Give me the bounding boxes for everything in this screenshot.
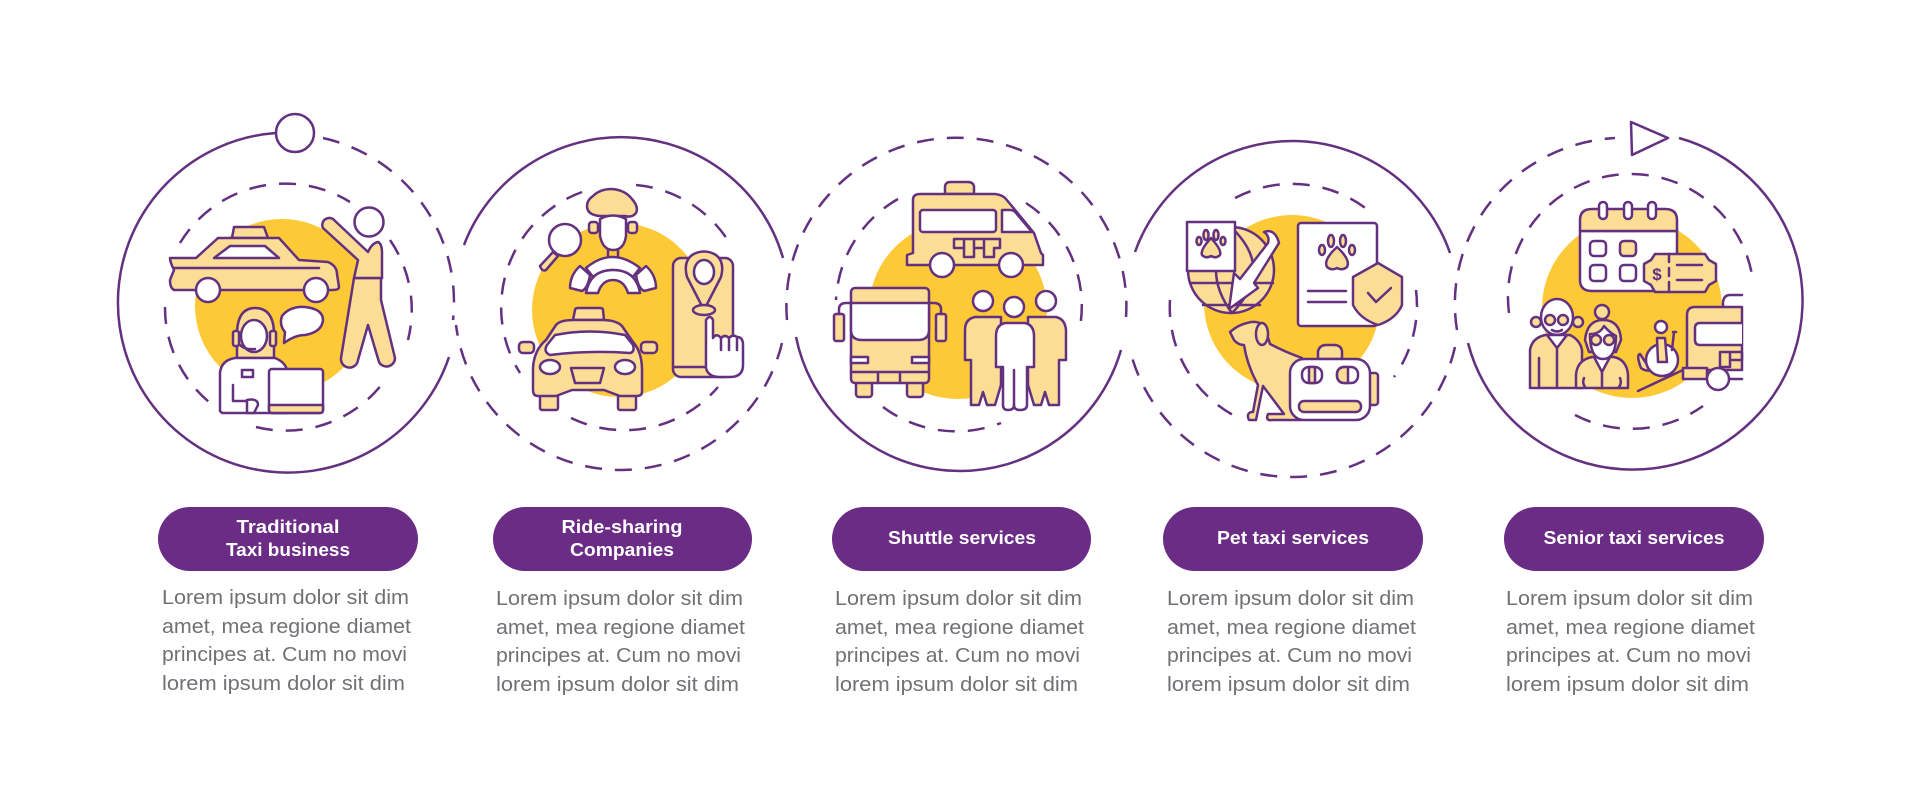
- icon: ticket: [1644, 254, 1716, 292]
- pill: Shuttle services: Shuttle services: [888, 528, 1036, 548]
- pill: Shuttle services: [832, 507, 1091, 571]
- inner dashed ring: [1508, 174, 1753, 429]
- inner dashed ring: [1170, 184, 1417, 415]
- icon: taxi car: [170, 227, 339, 302]
- text: column 3 body: Lorem ipsum dolor sit dim: [835, 587, 1082, 610]
- text: column 3 body: lorem ipsum dolor sit dim: [835, 673, 1078, 696]
- yellow blob 5: [1542, 218, 1722, 398]
- pill: Ride-sharing Companies: Companies: [570, 540, 674, 560]
- text: column 5 body: Lorem ipsum dolor sit dim: [1506, 587, 1753, 610]
- yellow blob 4: [1204, 215, 1380, 391]
- pill: Pet taxi services: Pet taxi services: [1217, 528, 1369, 548]
- icon: elderly man: [1530, 299, 1583, 388]
- text: column 5 body: principes at. Cum no movi: [1506, 644, 1751, 667]
- text: column 1 body: amet, mea regione diamet: [162, 615, 411, 638]
- text: column 1 body: lorem ipsum dolor sit dim: [162, 672, 405, 695]
- icon: dog: [1230, 322, 1302, 420]
- panel: senior taxi services: [1455, 122, 1803, 470]
- text: column 5 body: amet, mea regione diamet: [1506, 616, 1755, 639]
- icon: wheelchair on ramp: [1638, 321, 1683, 391]
- icon: taxi bus clipped: [1683, 295, 1742, 390]
- pill: Ride-sharing Companies: Ride-sharing: [562, 517, 682, 537]
- text: column 2 body: amet, mea regione diamet: [496, 616, 745, 639]
- icon: elderly woman: [1576, 305, 1628, 388]
- icon: globe with pet passport: [1187, 222, 1279, 313]
- icon: pet document with shield: [1298, 223, 1402, 326]
- pill: Ride-sharing Companies: [493, 507, 752, 571]
- icon: group of people: [965, 291, 1066, 410]
- outer ring: [1130, 141, 1455, 477]
- icon: person hailing: [322, 208, 395, 368]
- panel: traditional taxi business: [118, 114, 454, 473]
- inner dashed ring: [836, 199, 1082, 431]
- yellow blob 3: [869, 221, 1047, 399]
- text: column 1 body: [162, 586, 411, 695]
- text: column 2 body: principes at. Cum no movi: [496, 644, 741, 667]
- outer ring: [786, 138, 1126, 471]
- text: column 2 body: Lorem ipsum dolor sit dim: [496, 587, 743, 610]
- icon: taxi front view: [519, 308, 657, 410]
- icon: paw: [1319, 235, 1355, 269]
- text: column 5 body: [1506, 587, 1755, 696]
- yellow blob 1: [195, 219, 369, 393]
- text: column 1 body: Lorem ipsum dolor sit dim: [162, 586, 409, 609]
- icon: bus: [834, 288, 946, 397]
- inner dashed ring: [165, 184, 412, 431]
- panel: ride-sharing companies: [456, 137, 783, 470]
- pill: Pet taxi services: [1163, 507, 1423, 571]
- text: column 2 body: [496, 587, 745, 696]
- pill: Traditional Taxi business: [158, 507, 418, 571]
- icon: ticket: $: [1652, 265, 1662, 284]
- icon: calendar: [1580, 202, 1677, 291]
- outer ring with node: [118, 114, 454, 473]
- pill: Traditional Taxi business: Traditional: [236, 517, 340, 537]
- icon: call center agent: [220, 307, 323, 413]
- text: column 4 body: amet, mea regione diamet: [1167, 616, 1416, 639]
- outer ring with arrow: [1455, 122, 1803, 470]
- text: column 1 body: principes at. Cum no movi: [162, 643, 407, 666]
- text: column 4 body: [1167, 587, 1416, 696]
- text: column 4 body: lorem ipsum dolor sit dim: [1167, 673, 1410, 696]
- outer ring: [456, 137, 783, 470]
- pill: Senior taxi services: Senior taxi services: [1544, 528, 1724, 548]
- icon: taxi van: [907, 182, 1043, 277]
- text: column 5 body: lorem ipsum dolor sit dim: [1506, 673, 1749, 696]
- inner dashed ring: [501, 185, 729, 430]
- panel: pet taxi services: [1130, 141, 1455, 477]
- text: column 2 body: lorem ipsum dolor sit dim: [496, 673, 739, 696]
- pill: Senior taxi services: [1504, 507, 1764, 571]
- text: column 3 body: amet, mea regione diamet: [835, 616, 1084, 639]
- yellow blob 2: [532, 223, 706, 397]
- icon: pet carrier: [1290, 345, 1378, 420]
- icon: phone with pin: [673, 252, 743, 377]
- panel: shuttle services: [786, 138, 1126, 471]
- text: column 4 body: Lorem ipsum dolor sit dim: [1167, 587, 1414, 610]
- icon: paw: [1196, 230, 1226, 257]
- pill: Traditional Taxi business: Taxi business: [226, 540, 350, 560]
- icon: driver at wheel: [540, 189, 656, 293]
- text: column 3 body: [835, 587, 1084, 696]
- text: column 3 body: principes at. Cum no movi: [835, 644, 1080, 667]
- text: column 4 body: principes at. Cum no movi: [1167, 644, 1412, 667]
